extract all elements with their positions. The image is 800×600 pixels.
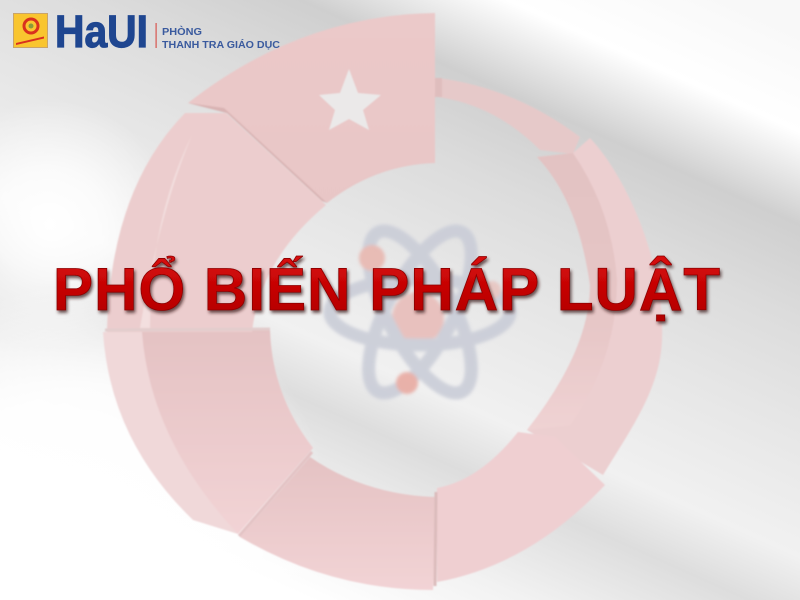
logo wordmark: HaUI [55,6,148,57]
seams between lower segments [105,329,436,586]
icon: atom [330,217,510,407]
ring graphic: six faded red segments [103,13,662,590]
segment: lower right [437,432,605,582]
segment: lower left [103,330,313,534]
segment: bottom [240,457,437,590]
connector tab [435,78,442,97]
logo: HaUI: THANH TRA GIÁO DỤC [162,38,280,51]
segment: thin upper right arc [438,78,580,154]
segment: right arc [527,138,662,475]
logo divider [156,23,157,48]
logo: HaUI [14,6,280,57]
segment: top with star [188,13,435,203]
icon: star [319,69,381,130]
logo emblem [14,14,48,48]
logo caption: PHÒNG [162,25,202,38]
segment: upper left [107,113,326,332]
title: PHỔ BIẾN PHÁP LUẬT [53,256,720,323]
